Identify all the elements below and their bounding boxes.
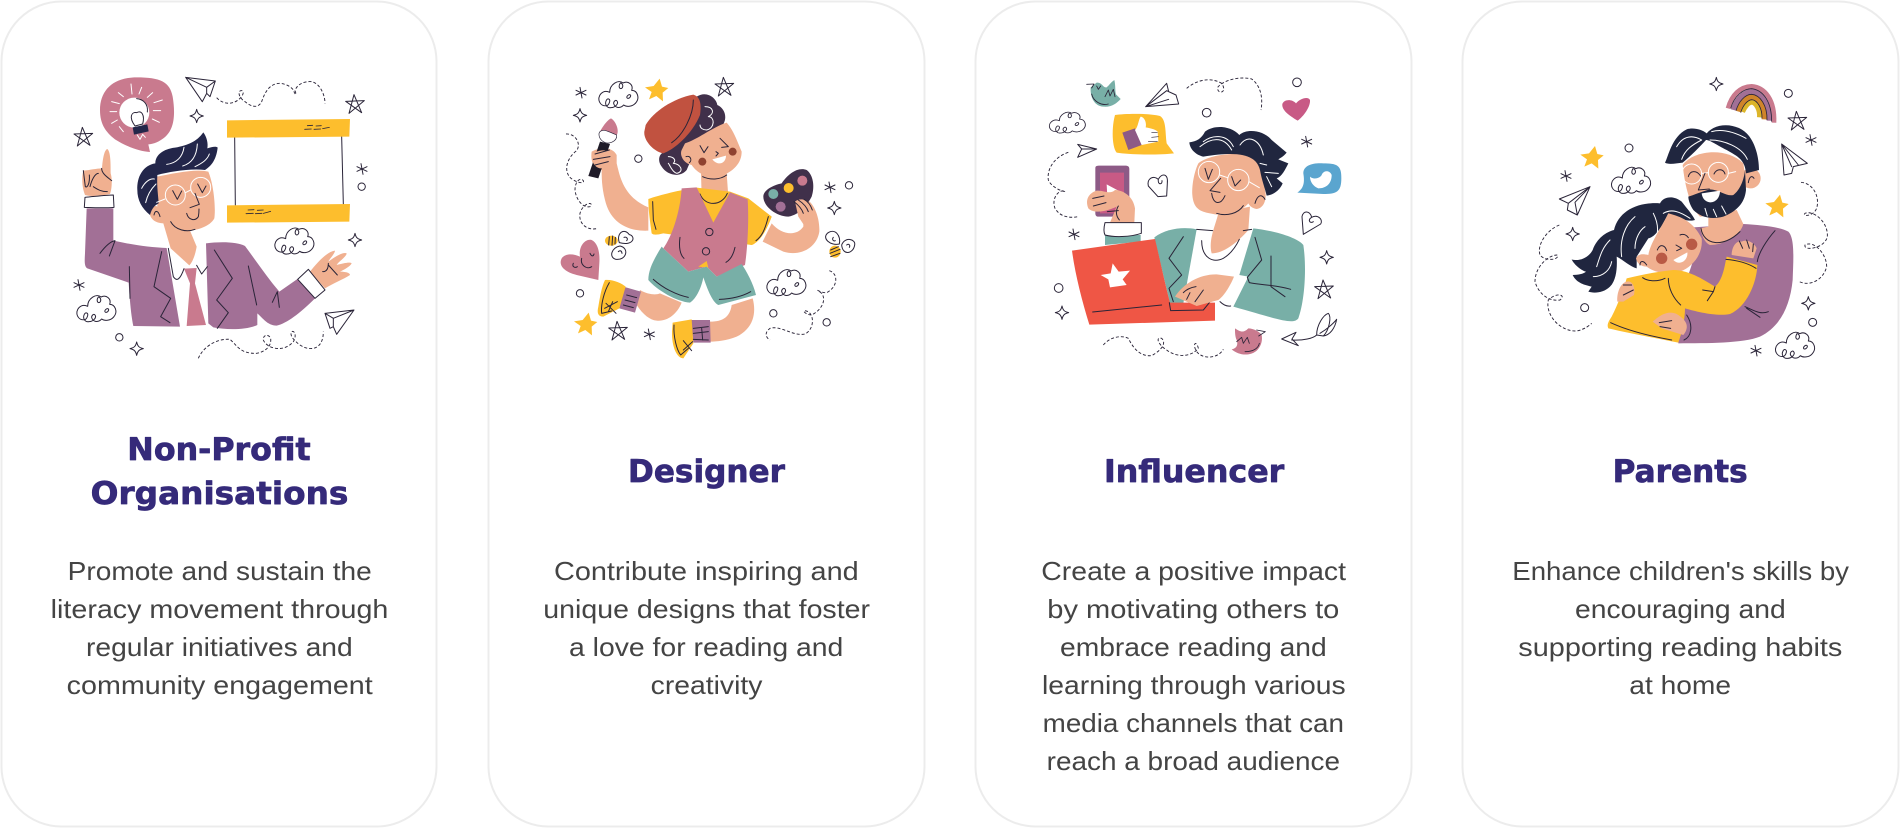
description: Influencer: by motivating others to — [1047, 594, 1339, 624]
icon: pink bird — [1232, 328, 1265, 354]
decorations — [561, 77, 853, 340]
description: Non-Profit: Promote and sustain the — [68, 556, 372, 586]
heading: Designer: Designer — [628, 454, 786, 490]
icon: twitter bubble — [1297, 163, 1341, 194]
heading: Parents: Parents — [1613, 454, 1748, 490]
man figure — [82, 132, 352, 329]
decorations — [1048, 78, 1337, 357]
illustration: influencer with phone and laptop — [1048, 78, 1341, 357]
daughter figure — [1572, 197, 1757, 343]
heading: Non-Profit Organisations — [91, 432, 348, 512]
icon: bee left — [605, 231, 633, 259]
decorations — [1535, 77, 1827, 358]
icon: yellow banner frame — [227, 119, 350, 223]
description: Non-Profit: community engagement — [67, 670, 374, 700]
description: Parents: at home — [1629, 670, 1731, 700]
panel: Designer card — [488, 2, 924, 826]
heading: Influencer: Influencer — [1104, 454, 1285, 490]
description: Parents — [1512, 556, 1849, 700]
description: Influencer — [1041, 556, 1347, 776]
painter figure — [588, 94, 819, 358]
father figure — [1665, 125, 1793, 343]
icon: rainbow — [1728, 86, 1774, 123]
description: Influencer: reach a broad audience — [1047, 746, 1340, 776]
icon: pink heart — [1282, 98, 1310, 121]
description: Non-Profit — [51, 556, 388, 700]
influencer figure — [1072, 127, 1305, 325]
icon: lightbulb speech bubble — [100, 77, 174, 152]
description: Influencer: media channels that can — [1043, 708, 1344, 738]
decorations — [74, 95, 367, 358]
illustration: jumping painter — [561, 77, 855, 358]
decorative dashed trail top — [217, 82, 325, 106]
description: Parents: supporting reading habits — [1518, 632, 1842, 662]
description: Designer: unique designs that foster — [543, 594, 870, 624]
description: Influencer: Create a positive impact — [1041, 556, 1347, 586]
description: Non-Profit: regular initiatives and — [86, 632, 353, 662]
heading: Non-Profit Organisations: Organisations — [91, 476, 348, 512]
heading: Non-Profit Organisations: Non-Profit — [127, 432, 311, 468]
panel: Parents card — [1462, 2, 1898, 826]
illustration: father hugging daughter — [1535, 77, 1827, 358]
icon: bee right — [826, 231, 855, 258]
description: Parents: encouraging and — [1575, 594, 1786, 624]
description: Designer: a love for reading and — [569, 632, 843, 662]
description: Parents: Enhance children's skills by — [1512, 556, 1849, 586]
description: Influencer: embrace reading and — [1060, 632, 1327, 662]
icon: thumbs up bubble — [1113, 114, 1174, 155]
description: Designer: creativity — [651, 670, 762, 700]
description: Designer: Contribute inspiring and — [554, 556, 859, 586]
description: Designer — [543, 556, 870, 700]
panel: Influencer card — [976, 2, 1412, 826]
panel: Non-Profit Organisations card — [2, 2, 436, 826]
description: Influencer: learning through various — [1042, 670, 1346, 700]
description: Non-Profit: literacy movement through — [51, 594, 388, 624]
icon: paper plane — [186, 77, 215, 102]
illustration: man presenting with banner — [74, 77, 367, 358]
icon: teal bird — [1087, 80, 1121, 107]
